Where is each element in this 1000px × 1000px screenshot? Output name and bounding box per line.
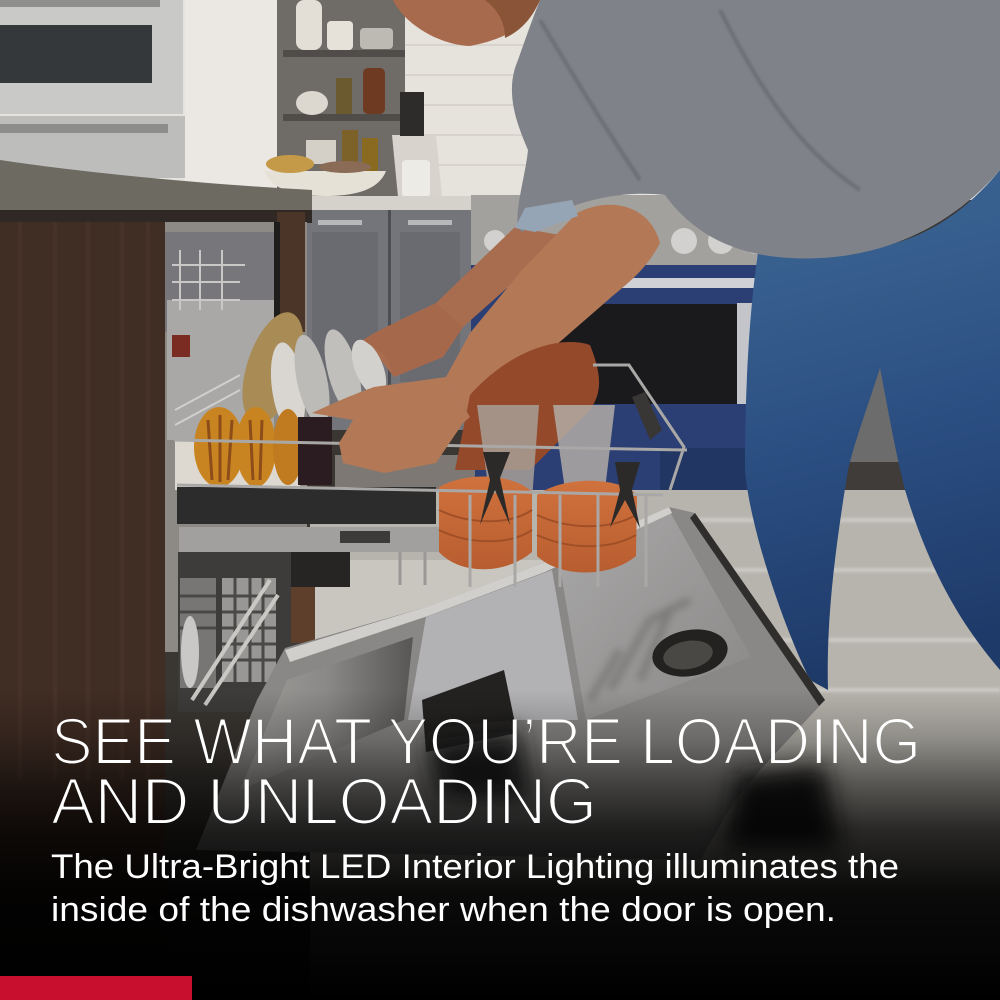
open shelves	[277, 0, 405, 197]
island counter	[0, 160, 312, 223]
blurred foreground	[425, 730, 530, 800]
door vent	[649, 624, 731, 682]
glasses behind hand	[335, 455, 475, 489]
body text: The Ultra-Bright LED Interior Lighting illuminates the	[51, 848, 899, 886]
jeans	[745, 170, 1000, 690]
shirt	[512, 0, 1000, 258]
right cabinet	[840, 340, 910, 462]
far arm	[365, 227, 560, 377]
door reflections	[590, 600, 690, 700]
heading: SEE WHAT YOU’RE LOADING	[51, 704, 921, 778]
pan and plates	[230, 305, 393, 436]
glass bowl	[455, 342, 599, 470]
face and neck	[393, 0, 540, 46]
wall oven	[0, 0, 185, 178]
far counter	[305, 196, 475, 210]
dark rail	[177, 487, 436, 524]
range cooktop	[471, 195, 771, 267]
dishes and rack	[174, 303, 687, 587]
rack clips	[480, 452, 640, 528]
knife block	[392, 92, 442, 197]
near hand	[312, 377, 470, 473]
heading: AND UNLOADING	[51, 764, 597, 838]
red accent bar	[0, 976, 192, 1000]
body text	[51, 848, 899, 929]
dark block under rail	[291, 552, 350, 587]
body text: inside of the dishwasher when the door is open.	[51, 891, 836, 929]
fruit bowl	[264, 155, 386, 196]
blue oven	[471, 265, 771, 500]
near arm	[446, 205, 660, 417]
floor	[310, 490, 1000, 1000]
glasses	[477, 405, 615, 500]
heading	[51, 704, 921, 838]
far hand	[363, 303, 463, 377]
gold patterned dishes	[194, 407, 303, 487]
brown cabinet panel	[0, 222, 165, 1000]
person	[365, 0, 1000, 690]
rack handle	[632, 392, 662, 440]
dark rack clip	[298, 417, 332, 485]
rack wires	[174, 365, 687, 587]
bottom dark gradient	[0, 690, 1000, 1000]
dishwasher door	[196, 507, 840, 860]
silver slide rail	[179, 527, 444, 552]
lower rack cutlery baskets	[178, 552, 315, 712]
gray cabinets	[305, 210, 471, 430]
wall tiles	[405, 0, 535, 197]
dishwasher interior	[163, 212, 307, 652]
orange bowls	[439, 476, 637, 572]
door dispenser	[422, 670, 517, 752]
